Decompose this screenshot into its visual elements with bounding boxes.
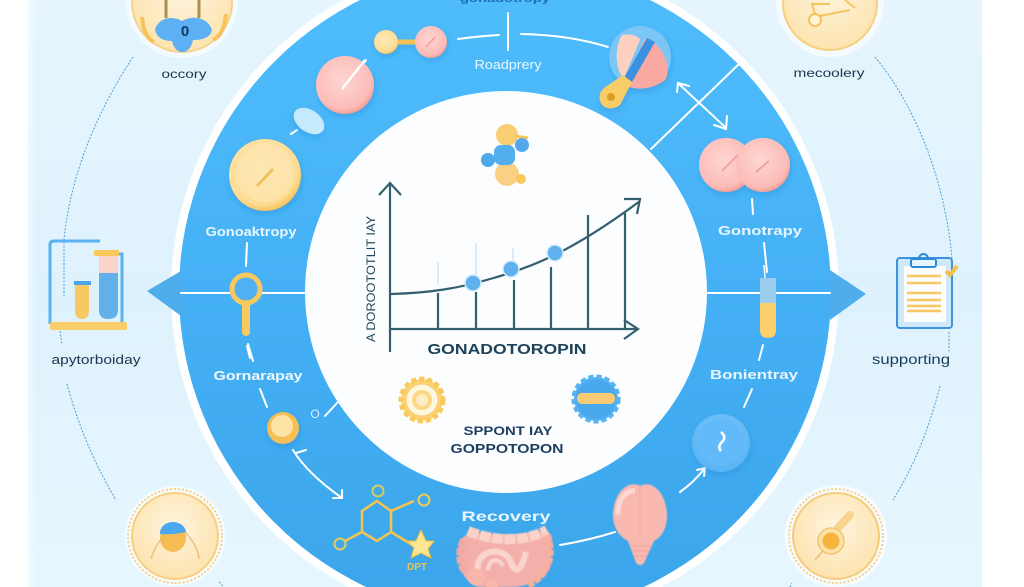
pill: small yellow [267,412,299,444]
support caption: GOPPOTOPON [450,441,564,456]
dotted connector arcs [60,57,952,587]
chart x axis label: GONADOTOROPIN [428,341,586,358]
label: left test tube caption: apytorboiday [52,352,141,367]
main ring [171,0,839,587]
medallion: bottom right [785,485,887,587]
icon: test tubes [50,241,127,330]
medallion: bottom left [125,486,225,586]
support caption [450,424,564,456]
icon: vertical test tube [760,265,776,338]
pill: small yellow and pink pair [374,26,447,58]
icon: clipboard [897,254,957,328]
medallion: recovery top right [776,0,884,57]
side pointer: right [830,270,866,320]
icon: chemical structure with star: DPT [407,562,427,573]
icon: blue gear [574,377,618,421]
pill: large pink [316,56,374,114]
pill: pale lens [289,102,329,140]
label: ovary: occory [162,67,206,81]
icon: pink capsule with key [599,26,671,108]
ring label: upper left: Gonoaktropy [206,224,297,239]
chart data points [465,245,563,291]
icon: chemical structure with star [334,486,434,573]
ring label: top: Roadprery [474,57,542,72]
icon: molecule [481,124,529,186]
faint chart guides [438,243,513,285]
label: small mark O: O [310,407,320,421]
inner white circle [305,91,707,493]
ring label: bottom: Recovery [462,508,551,524]
ring label: lower right: Bonientray [710,367,799,382]
side pointer: left [147,271,181,316]
ring label: upper right: Gonotrapy [718,223,803,238]
icon: brain stem organ [613,484,667,565]
icon: yellow magnifier [232,275,260,332]
ring label: lower left: Gornarapay [214,368,303,383]
pill: blue button [692,414,750,472]
chart y axis label: A DOROOTOTLIT IAY [366,216,378,342]
support caption: SPPONT IAY [464,424,552,438]
label: supporting: supporting [872,352,950,367]
ring connector lines [181,13,830,545]
pill: double pink [699,138,790,192]
chart axes and bars [379,183,640,352]
icon: intestines [459,530,551,587]
icon: yellow gear [401,379,443,421]
line chart [379,183,640,352]
medallion: ovary top left: 0 [181,23,189,40]
label: recovery: mecoolery [794,66,864,80]
pill: large yellow [229,139,301,211]
medallion: ovary top left [126,0,238,58]
